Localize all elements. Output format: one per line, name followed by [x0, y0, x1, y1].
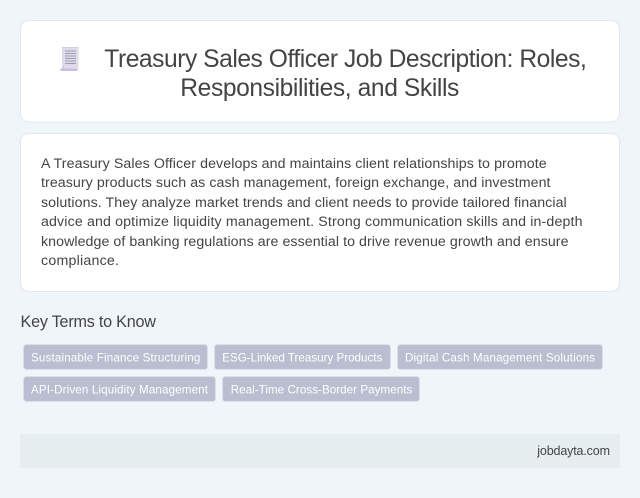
- tag: digital cash: [398, 344, 602, 370]
- panel: description card: [20, 134, 620, 292]
- tag: sustainable finance: [24, 344, 208, 370]
- tag list: [24, 344, 602, 402]
- tag: digital cash: Digital Cash Management Solutions: [405, 351, 595, 364]
- description paragraph: knowledge of banking regulations are essential to drive revenue growth and ensure: [41, 234, 569, 250]
- tag: real-time: [222, 376, 420, 402]
- panel: title card: [20, 20, 620, 122]
- tag: api-driven: [24, 376, 216, 402]
- tag: sustainable finance: Sustainable Finance Structuring: [31, 351, 200, 364]
- tag: esg-linked: ESG-Linked Treasury Products: [222, 351, 383, 364]
- description paragraph: solutions. They analyze market trends and client needs to provide tailored financial: [41, 195, 567, 211]
- description paragraph: treasury products such as cash management, foreign exchange, and investment: [41, 175, 551, 191]
- title text: Treasury Sales Officer Job Description: Roles,: [104, 46, 587, 73]
- footer: [20, 434, 620, 468]
- tag: api-driven: API-Driven Liquidity Management: [31, 383, 209, 396]
- description paragraph: [41, 156, 582, 269]
- title text: Responsibilities, and Skills: [180, 75, 459, 102]
- tag: esg-linked: [214, 344, 390, 370]
- heading: key terms: Key Terms to Know: [20, 313, 156, 331]
- description paragraph: compliance.: [41, 253, 119, 269]
- footer: jobdayta.com: [536, 444, 610, 458]
- title text: [104, 46, 587, 102]
- icon: receipt document: [60, 47, 78, 71]
- description paragraph: advice and optimize liquidity management. Strong communication skills and in-depth: [41, 214, 582, 230]
- tag: real-time: Real-Time Cross-Border Payments: [231, 383, 413, 396]
- description paragraph: A Treasury Sales Officer develops and maintains client relationships to promote: [41, 156, 547, 172]
